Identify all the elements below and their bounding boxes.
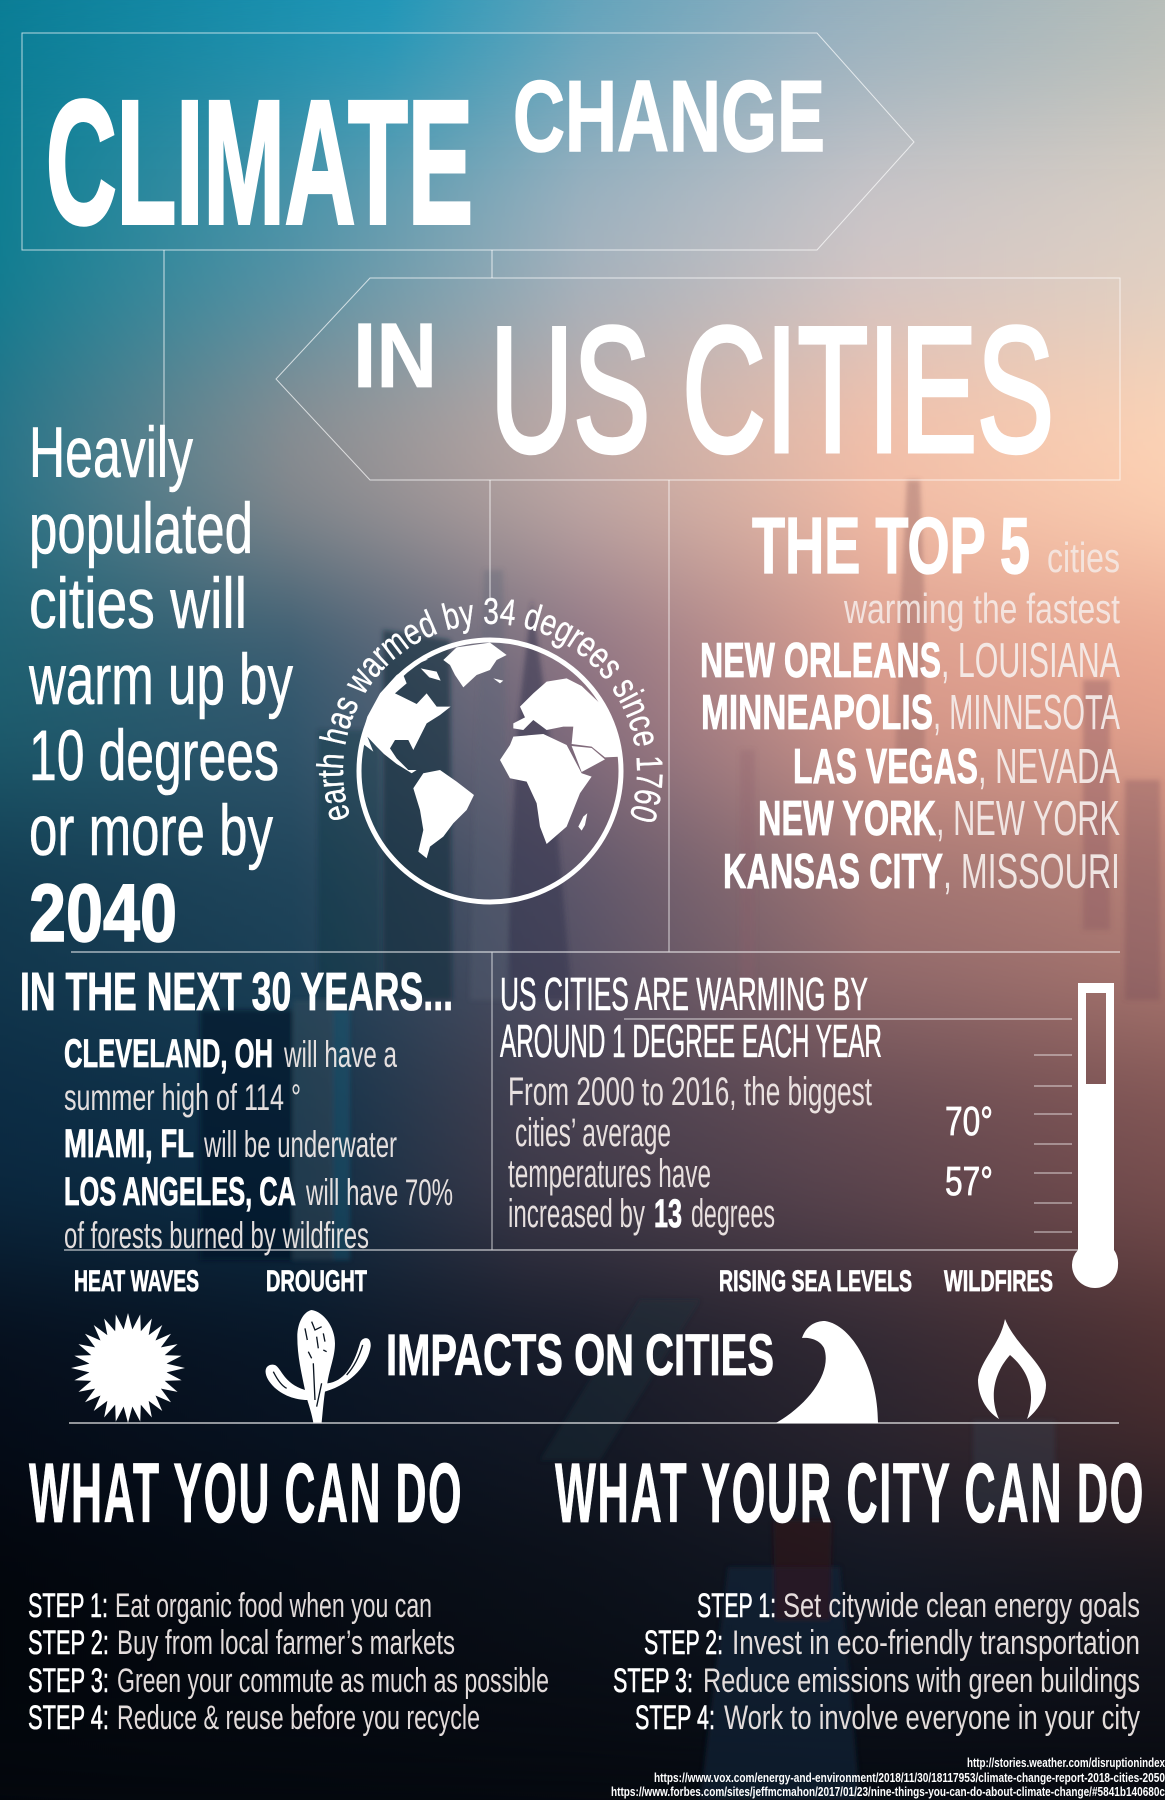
text block: heavily populated cities: cities will xyxy=(29,565,247,644)
text block: in the next 30 years xyxy=(20,962,453,1256)
icon: wildfire flame xyxy=(944,1265,1053,1419)
icon: rising sea level wave xyxy=(719,1265,912,1423)
text block: heavily populated cities: Heavily xyxy=(29,414,193,493)
list: city steps: STEP 2: xyxy=(644,1624,723,1662)
list: city steps: STEP 1: xyxy=(697,1587,776,1625)
list: personal steps xyxy=(28,1587,549,1737)
source links xyxy=(611,1755,1165,1799)
chart: thermometer: 57° xyxy=(945,1158,993,1204)
connector lines xyxy=(64,250,1120,1423)
list: personal steps: Green your commute as much as possible xyxy=(117,1662,549,1700)
text block: top 5 cities: KANSAS CITY xyxy=(723,845,943,899)
text block: in the next 30 years: will have 70% xyxy=(305,1172,453,1213)
list: city steps: STEP 4: xyxy=(635,1699,715,1737)
text block: in the next 30 years: LOS ANGELES, CA xyxy=(64,1170,296,1214)
chart: thermometer: 70° xyxy=(945,1098,993,1144)
text block: US cities warming: From 2000 to 2016, the biggest xyxy=(508,1070,872,1114)
list: personal steps: STEP 1: xyxy=(28,1587,108,1625)
title sign: climate change: CHANGE xyxy=(513,61,825,173)
text block: top 5 cities: THE TOP 5 xyxy=(752,501,1030,590)
chart: thermometer xyxy=(945,983,1118,1288)
text block: US cities warming: 13 xyxy=(654,1192,682,1236)
icon: wildfire flame: WILDFIRES xyxy=(944,1265,1053,1298)
list: city steps xyxy=(613,1587,1140,1737)
icon: globe with curved caption: earth has warmed by 34 degrees since 1760 xyxy=(316,598,663,822)
text block: heavily populated cities xyxy=(28,414,293,959)
text block: top 5 cities: MINNEAPOLIS xyxy=(701,686,933,740)
text block: heavily populated cities: or more by xyxy=(29,792,273,871)
title sign: climate change: CLIMATE xyxy=(46,65,473,261)
list: personal steps: STEP 2: xyxy=(28,1624,109,1662)
text block: top 5 cities: NEW YORK xyxy=(758,792,936,846)
text block: top 5 cities: LAS VEGAS xyxy=(793,740,978,794)
text block: US cities warming: degrees xyxy=(691,1192,775,1236)
icon: drought cactus xyxy=(266,1265,371,1423)
text block: in the next 30 years: will be underwater xyxy=(203,1124,397,1165)
text block: top 5 cities: cities xyxy=(1047,534,1120,581)
list: personal steps: Buy from local farmer’s markets xyxy=(117,1624,455,1662)
text block: in the next 30 years: of forests burned by wildfires xyxy=(64,1215,369,1256)
list: personal steps: Eat organic food when you can xyxy=(115,1587,432,1625)
text block: in the next 30 years: MIAMI, FL xyxy=(64,1122,194,1166)
text block: US cities warming: increased by xyxy=(508,1192,645,1236)
panel: impacts on cities xyxy=(71,1265,1053,1423)
title sign: in US cities: IN xyxy=(353,305,437,407)
text block: heavily populated cities: populated xyxy=(29,490,253,569)
text block: US cities warming: US CITIES ARE WARMING BY xyxy=(500,968,868,1020)
text block: heavily populated cities: 2040 xyxy=(29,868,177,959)
text block: in the next 30 years: IN THE NEXT 30 YEARS... xyxy=(20,962,453,1022)
text block: US cities warming: temperatures have xyxy=(508,1152,711,1196)
text block: US cities warming: cities’ average xyxy=(515,1111,671,1155)
text block: in the next 30 years: will have a xyxy=(283,1034,397,1075)
heading: what you can do: WHAT YOU CAN DO xyxy=(29,1446,463,1540)
icon: drought cactus: DROUGHT xyxy=(266,1265,367,1298)
text block: top 5 cities: NEW ORLEANS xyxy=(700,634,941,688)
icon: rising sea level wave: RISING SEA LEVELS xyxy=(719,1265,912,1298)
list: personal steps: STEP 3: xyxy=(28,1662,109,1700)
text block: heavily populated cities: warm up by xyxy=(28,641,293,720)
title sign: in US cities xyxy=(276,278,1120,489)
list: city steps: STEP 3: xyxy=(613,1662,693,1700)
icon: heat waves sun xyxy=(71,1265,199,1423)
icon: heat waves sun: HEAT WAVES xyxy=(74,1265,199,1298)
list: personal steps: Reduce & reuse before you recycle xyxy=(117,1699,480,1737)
list: personal steps: STEP 4: xyxy=(28,1699,109,1737)
text block: top 5 cities xyxy=(700,501,1120,899)
text block: heavily populated cities: 10 degrees xyxy=(29,717,279,796)
text block: US cities warming xyxy=(500,968,882,1236)
text block: in the next 30 years: CLEVELAND, OH xyxy=(64,1032,273,1076)
text block: in the next 30 years: summer high of 114 ° xyxy=(64,1077,301,1118)
panel: impacts on cities: IMPACTS ON CITIES xyxy=(386,1323,774,1388)
